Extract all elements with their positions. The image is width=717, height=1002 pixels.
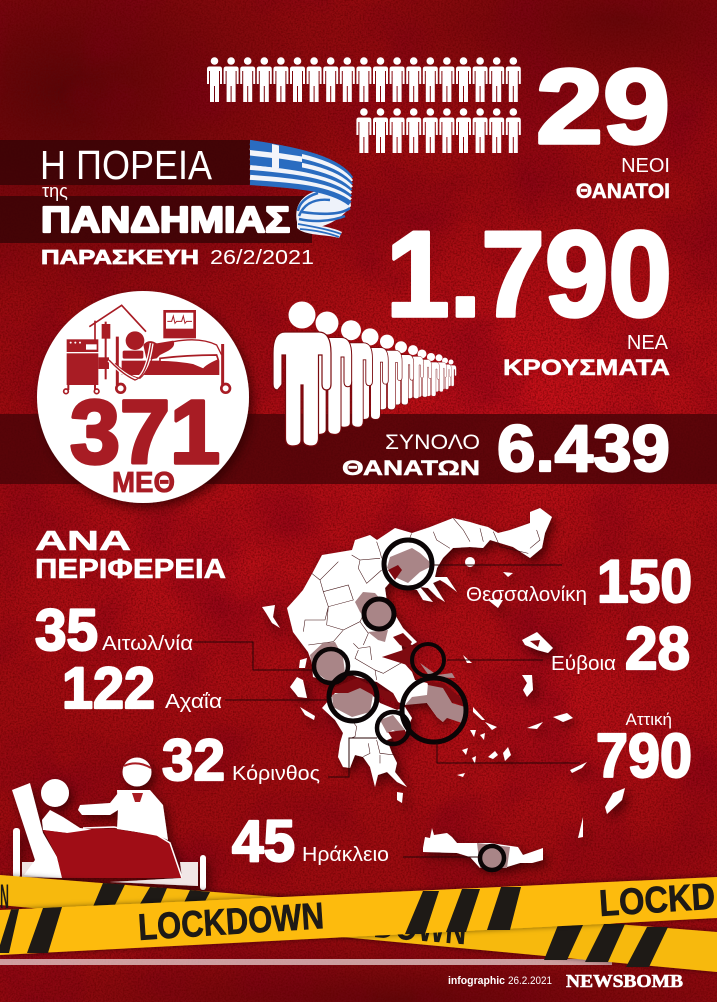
stat: new cases: ΚΡΟΥΣΜΑΤΑ xyxy=(503,355,670,380)
panel: ICU circle xyxy=(37,291,249,503)
title banner: της xyxy=(42,181,68,201)
stat: new deaths: 29 xyxy=(536,48,670,166)
region label: Εύβοια xyxy=(551,615,690,682)
footer credit: NEWSBOMB xyxy=(566,971,683,991)
lockdown tape: back xyxy=(0,875,717,972)
panel: ICU circle: 371 xyxy=(70,383,220,483)
highlighted regions xyxy=(310,548,510,868)
region label: Εύβοια: 28 xyxy=(625,615,690,682)
people icons: 29 new deaths xyxy=(207,57,521,153)
mainland and islands xyxy=(262,508,625,868)
region label: Αιτωλ/νία: 35 xyxy=(35,598,98,663)
icon: doctor with patient in bed xyxy=(12,758,206,890)
icon: ICU bed and patient xyxy=(64,305,230,394)
footer credit: infographic xyxy=(448,975,505,987)
title banner: Η ΠΟΡΕΙΑ xyxy=(40,142,213,188)
region label: Εύβοια: Εύβοια xyxy=(551,653,616,675)
decorative stripe line xyxy=(0,959,612,965)
stat: total deaths: 6.439 xyxy=(497,411,670,485)
title banner: ΠΑΝΔΗΜΙΑΣ xyxy=(41,199,290,240)
region label: Κόρινθος xyxy=(162,728,320,793)
region label: Κόρινθος: 32 xyxy=(162,728,225,793)
region label: Θεσσαλονίκη: Θεσσαλονίκη xyxy=(466,584,587,606)
title banner: 26/2/2021 xyxy=(210,247,314,269)
stat: new deaths xyxy=(536,48,670,203)
icon: queue of people xyxy=(273,302,456,446)
stat: new cases: 1.790 xyxy=(386,206,672,342)
region label: Θεσσαλονίκη: 150 xyxy=(597,548,692,615)
region label: Αχαΐα: 122 xyxy=(62,656,155,721)
dark gulfs and sea areas xyxy=(335,565,540,743)
heading: per region: ΑΝΑ xyxy=(35,525,131,556)
footer credit xyxy=(448,971,683,991)
map: Greece xyxy=(262,508,625,870)
stat: total deaths: ΣΥΝΟΛΟ xyxy=(385,431,480,454)
region label: Αττική: 790 xyxy=(596,722,692,791)
region label: Θεσσαλονίκη xyxy=(466,548,692,615)
stat: new deaths: ΝΕΟΙ xyxy=(621,155,670,177)
region label: Αιτωλ/νία xyxy=(35,598,193,663)
region label: Αχαΐα: Αχαΐα xyxy=(165,691,222,713)
region label: Κόρινθος: Κόρινθος xyxy=(232,763,320,785)
lockdown tape: front: LOCKDOWN xyxy=(137,895,325,948)
stat: total deaths xyxy=(342,411,670,485)
panel: ICU circle: ΜΕΘ xyxy=(112,467,175,499)
stat: new deaths: ΘΑΝΑΤΟΙ xyxy=(576,180,670,203)
lockdown tape: front xyxy=(0,876,717,955)
region label: Ηράκλειο: 45 xyxy=(232,809,295,874)
icon: greek flag ribbon xyxy=(250,140,351,238)
title banner xyxy=(0,140,314,269)
lockdown tape: back: N xyxy=(0,878,9,916)
lockdown tape: back: DOWN xyxy=(372,904,468,953)
region label: Αττική: Αττική xyxy=(625,710,672,729)
regional borders xyxy=(303,518,540,645)
stat: new cases: ΝΕΑ xyxy=(627,332,669,354)
stat: total deaths: ΘΑΝΑΤΩΝ xyxy=(342,457,480,480)
heading: per region: ΠΕΡΙΦΕΡΕΙΑ xyxy=(35,553,226,584)
region label: Ηράκλειο: Ηράκλειο xyxy=(302,844,389,866)
leader lines xyxy=(193,565,580,857)
region label: Αιτωλ/νία: Αιτωλ/νία xyxy=(102,633,193,655)
region label: Ηράκλειο xyxy=(232,809,389,874)
band: total deaths backdrop xyxy=(0,414,717,484)
heading: per region xyxy=(35,525,226,584)
location rings xyxy=(314,540,504,870)
footer credit: 26.2.2021 xyxy=(508,975,552,987)
title banner: ΠΑΡΑΣΚΕΥΗ xyxy=(41,247,199,269)
region label: Αχαΐα xyxy=(62,656,222,721)
